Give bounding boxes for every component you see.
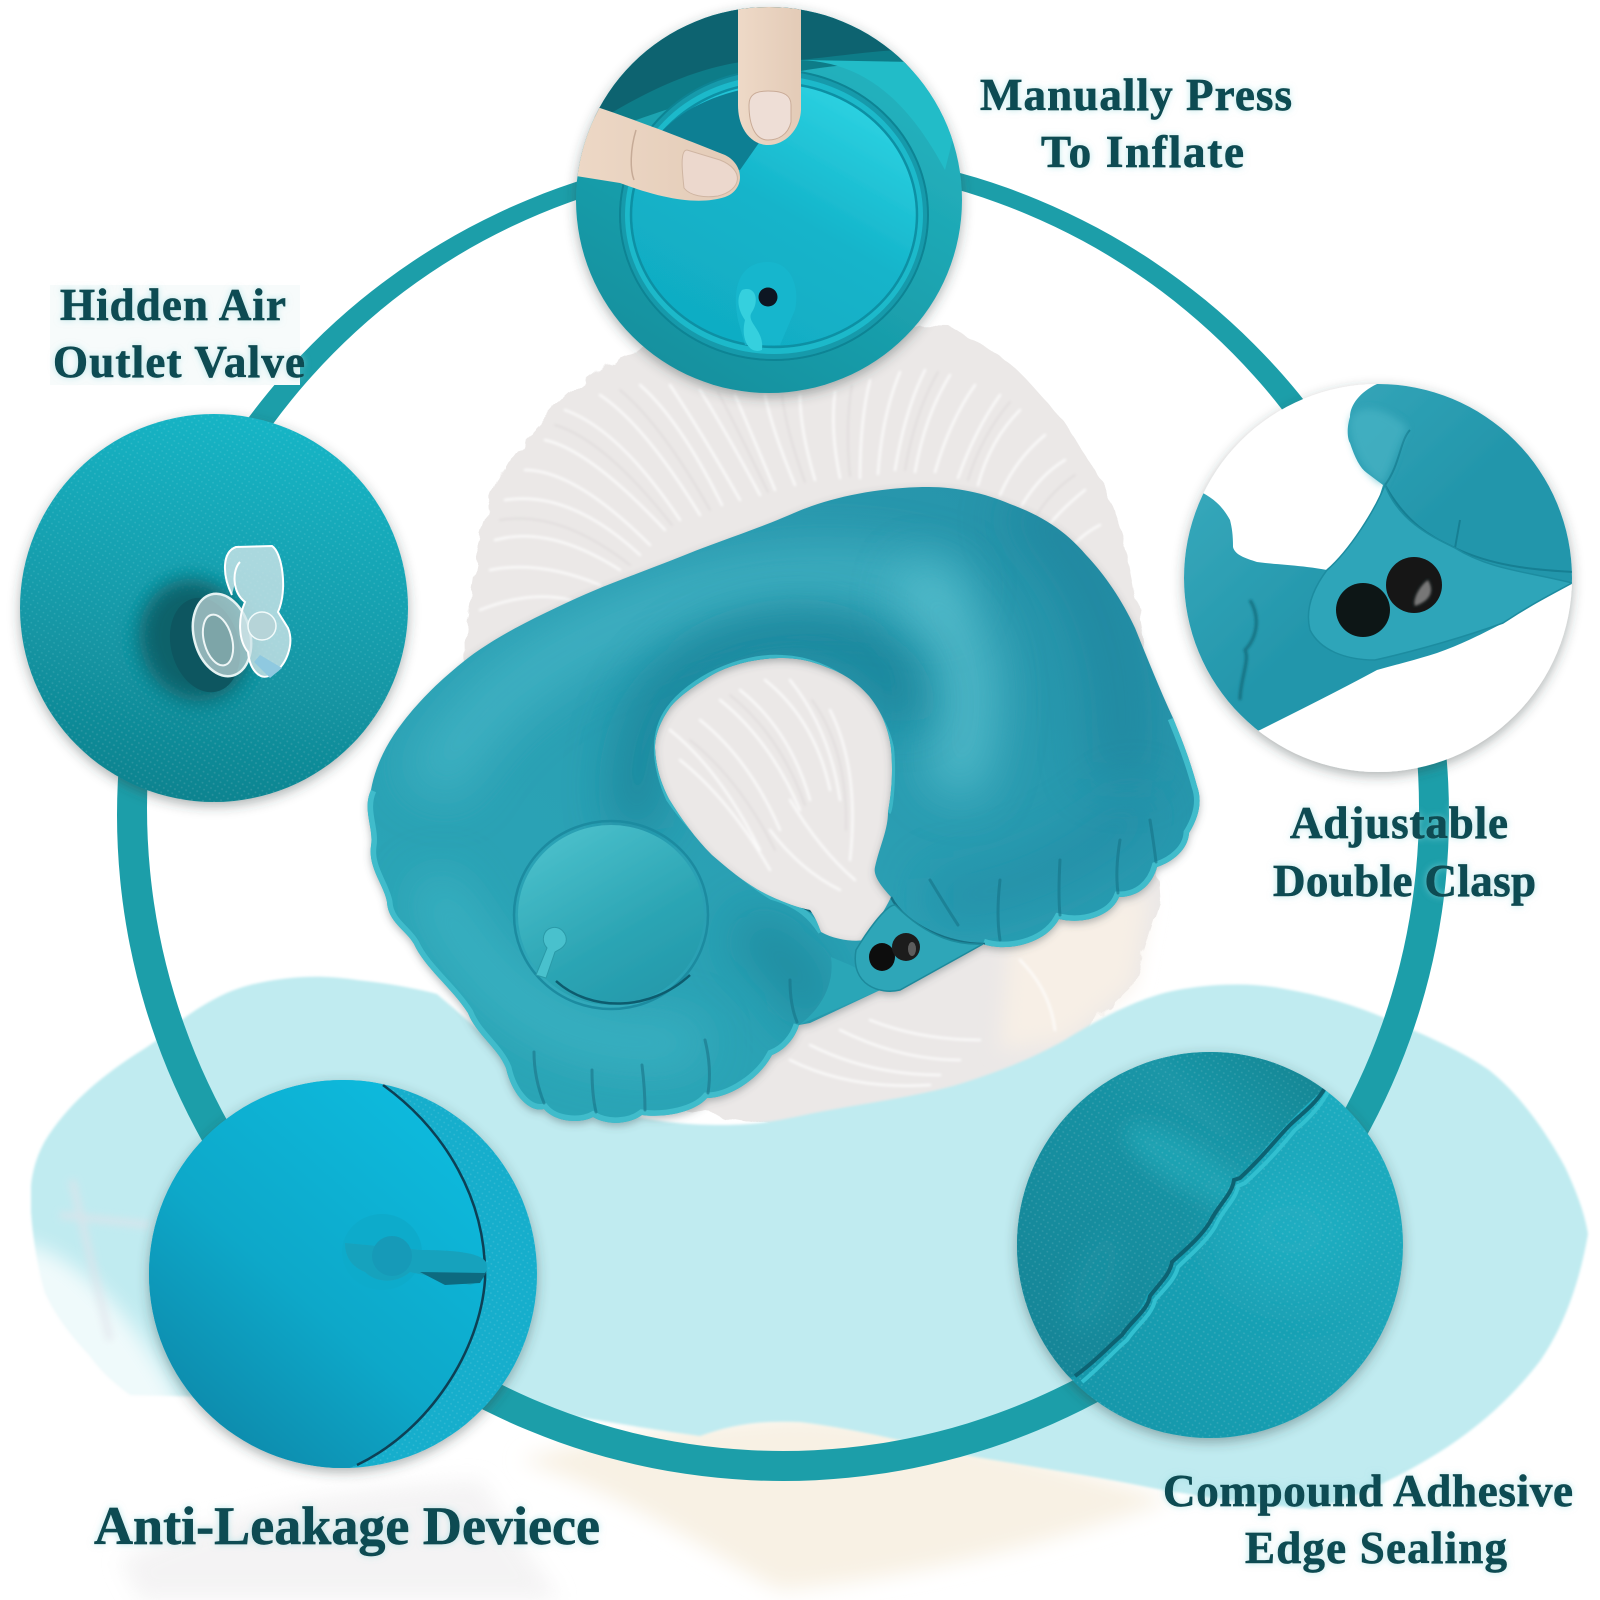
label backing: hidden air xyxy=(50,285,300,385)
background: ghost head with fur texture xyxy=(465,327,1160,1130)
pump button xyxy=(514,821,708,1009)
label: hidden air outlet valve: Outlet Valve xyxy=(53,337,305,387)
valve recess xyxy=(736,262,796,345)
label: compound adhesive edge sealing: Compound Adhesive xyxy=(1163,1466,1573,1516)
clasp: black snap buttons xyxy=(869,943,895,971)
label: compound adhesive edge sealing xyxy=(1163,1466,1573,1573)
pillow: lobe seam xyxy=(891,897,985,944)
pillow: scalloped edge rim xyxy=(368,718,1200,1123)
pillow: hole inner rim xyxy=(657,658,892,932)
label: manually press to inflate: To Inflate xyxy=(1041,127,1244,177)
seam folds xyxy=(1075,1088,1325,1376)
pillow: tufting creases xyxy=(534,820,1156,1112)
label: hidden air outlet valve: Hidden Air xyxy=(60,280,286,330)
valve recess xyxy=(345,1214,421,1280)
transparent valve xyxy=(184,546,290,683)
pump button: pull tab xyxy=(536,927,566,978)
background: pale teal shoulders xyxy=(31,977,1588,1509)
background: grey collar fade xyxy=(120,1480,560,1600)
snap buttons xyxy=(1336,583,1390,637)
upper left fabric xyxy=(1000,1030,1325,1400)
panel: edge sealing bottom-right circle xyxy=(1000,1030,1403,1438)
pillow clasp xyxy=(855,905,983,991)
thumb xyxy=(738,0,801,145)
pillow: shading xyxy=(430,500,1150,1043)
label: anti-leakage device: Anti-Leakage Deviece xyxy=(94,1496,600,1556)
valve dark base xyxy=(122,563,268,717)
label: compound adhesive edge sealing: Edge Sealing xyxy=(1245,1523,1508,1573)
pillow piece xyxy=(1184,384,1572,731)
label: adjustable double clasp xyxy=(1273,798,1536,906)
panel: hidden air valve left circle xyxy=(20,414,408,802)
connecting ring xyxy=(117,149,1449,1481)
index finger xyxy=(560,108,740,201)
panel: anti-leakage device bottom-left circle xyxy=(130,1070,537,1480)
background: left shoulder fade xyxy=(0,1240,190,1420)
background: shoulder crease xyxy=(60,1180,150,1340)
dark cover top xyxy=(594,7,911,118)
label: manually press to inflate: Manually Press xyxy=(980,70,1292,120)
clasp tab xyxy=(1308,485,1572,660)
panel: manual press top circle xyxy=(560,0,962,393)
label: adjustable double clasp: Adjustable xyxy=(1290,798,1508,848)
inner disc rings xyxy=(620,70,928,360)
disc face xyxy=(149,1080,484,1468)
panel: double clasp right circle xyxy=(1180,380,1580,772)
label: adjustable double clasp: Double Clasp xyxy=(1273,856,1536,906)
valve tab xyxy=(345,1236,487,1285)
label: hidden air outlet valve xyxy=(53,280,305,387)
label: manually press to inflate xyxy=(980,70,1292,177)
pillow xyxy=(368,487,1200,1123)
background: cream sweater fade xyxy=(520,1415,1170,1590)
